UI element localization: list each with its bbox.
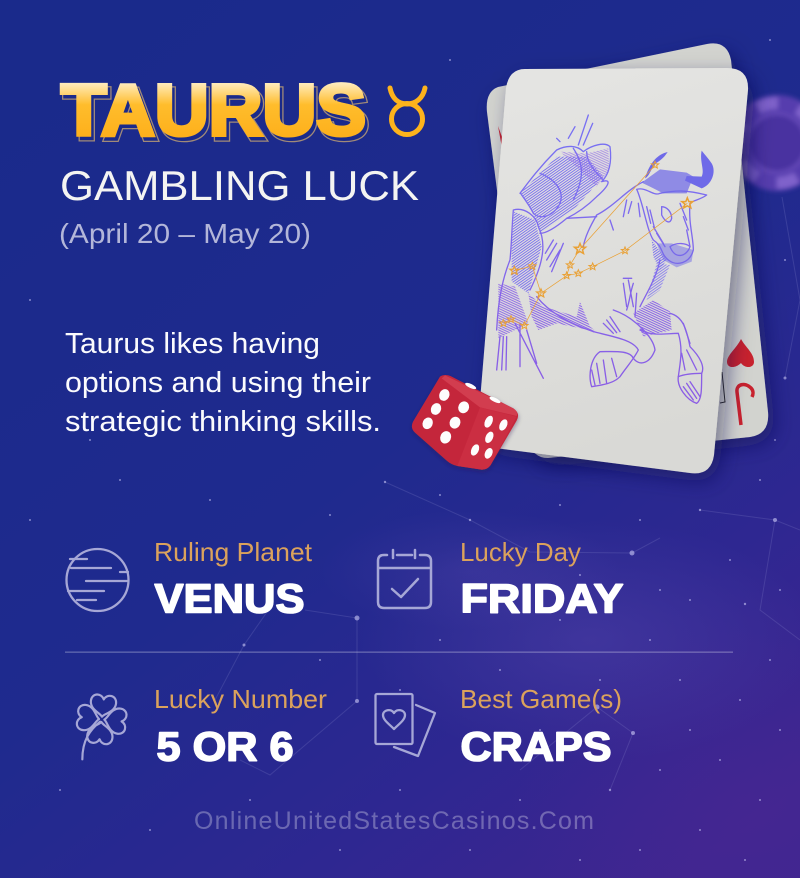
date range: (April 20 – May 20) bbox=[59, 218, 311, 249]
description text: Taurus likes having bbox=[65, 328, 320, 360]
heading: Gambling Luck: GAMBLING LUCK bbox=[60, 162, 419, 209]
stat: ruling planet bbox=[66, 537, 313, 622]
stat: best games: CRAPS bbox=[460, 724, 612, 770]
bull horns and forelock bbox=[642, 151, 714, 267]
stat: ruling planet: VENUS bbox=[154, 576, 304, 622]
description text bbox=[65, 328, 381, 438]
description text: strategic thinking skills. bbox=[65, 406, 381, 438]
stat: lucky number: Lucky Number bbox=[154, 684, 327, 714]
icon: cards with heart bbox=[376, 694, 435, 756]
icon: Taurus zodiac symbol bbox=[390, 88, 425, 134]
icon: planet bbox=[66, 549, 128, 611]
back playing card: jack of hearts bbox=[487, 43, 768, 458]
icon: upside-down heart bbox=[727, 339, 754, 367]
bull illustration with constellation bbox=[497, 115, 714, 403]
stat: ruling planet: Ruling Planet bbox=[154, 537, 313, 567]
stat: lucky number bbox=[75, 684, 327, 770]
stat: best games bbox=[376, 684, 622, 770]
stat: lucky day: Lucky Day bbox=[460, 537, 581, 567]
title: TAURUS: TAURUS bbox=[64, 75, 369, 155]
icon: red die bbox=[412, 375, 518, 470]
divider bbox=[65, 652, 733, 653]
stat: lucky day: FRIDAY bbox=[460, 576, 624, 622]
stat: best games: Best Game(s) bbox=[460, 684, 622, 714]
playing cards with Taurus illustration bbox=[478, 43, 768, 473]
front playing card bbox=[478, 68, 748, 473]
stat: lucky day bbox=[378, 537, 624, 622]
icon: four-leaf clover bbox=[75, 693, 128, 759]
constellation of Taurus bbox=[500, 161, 693, 329]
letter J upside down bbox=[737, 385, 753, 425]
stat: lucky number: 5 OR 6 bbox=[156, 724, 294, 770]
description text: options and using their bbox=[65, 367, 372, 399]
title: TAURUS: TAURUS bbox=[61, 71, 366, 151]
title: TAURUS: TAURUS bbox=[64, 75, 369, 155]
footer: site name: OnlineUnitedStatesCasinos.Com bbox=[194, 807, 594, 835]
icon: blurred poker chip bbox=[729, 95, 800, 191]
icon: calendar bbox=[378, 550, 431, 608]
